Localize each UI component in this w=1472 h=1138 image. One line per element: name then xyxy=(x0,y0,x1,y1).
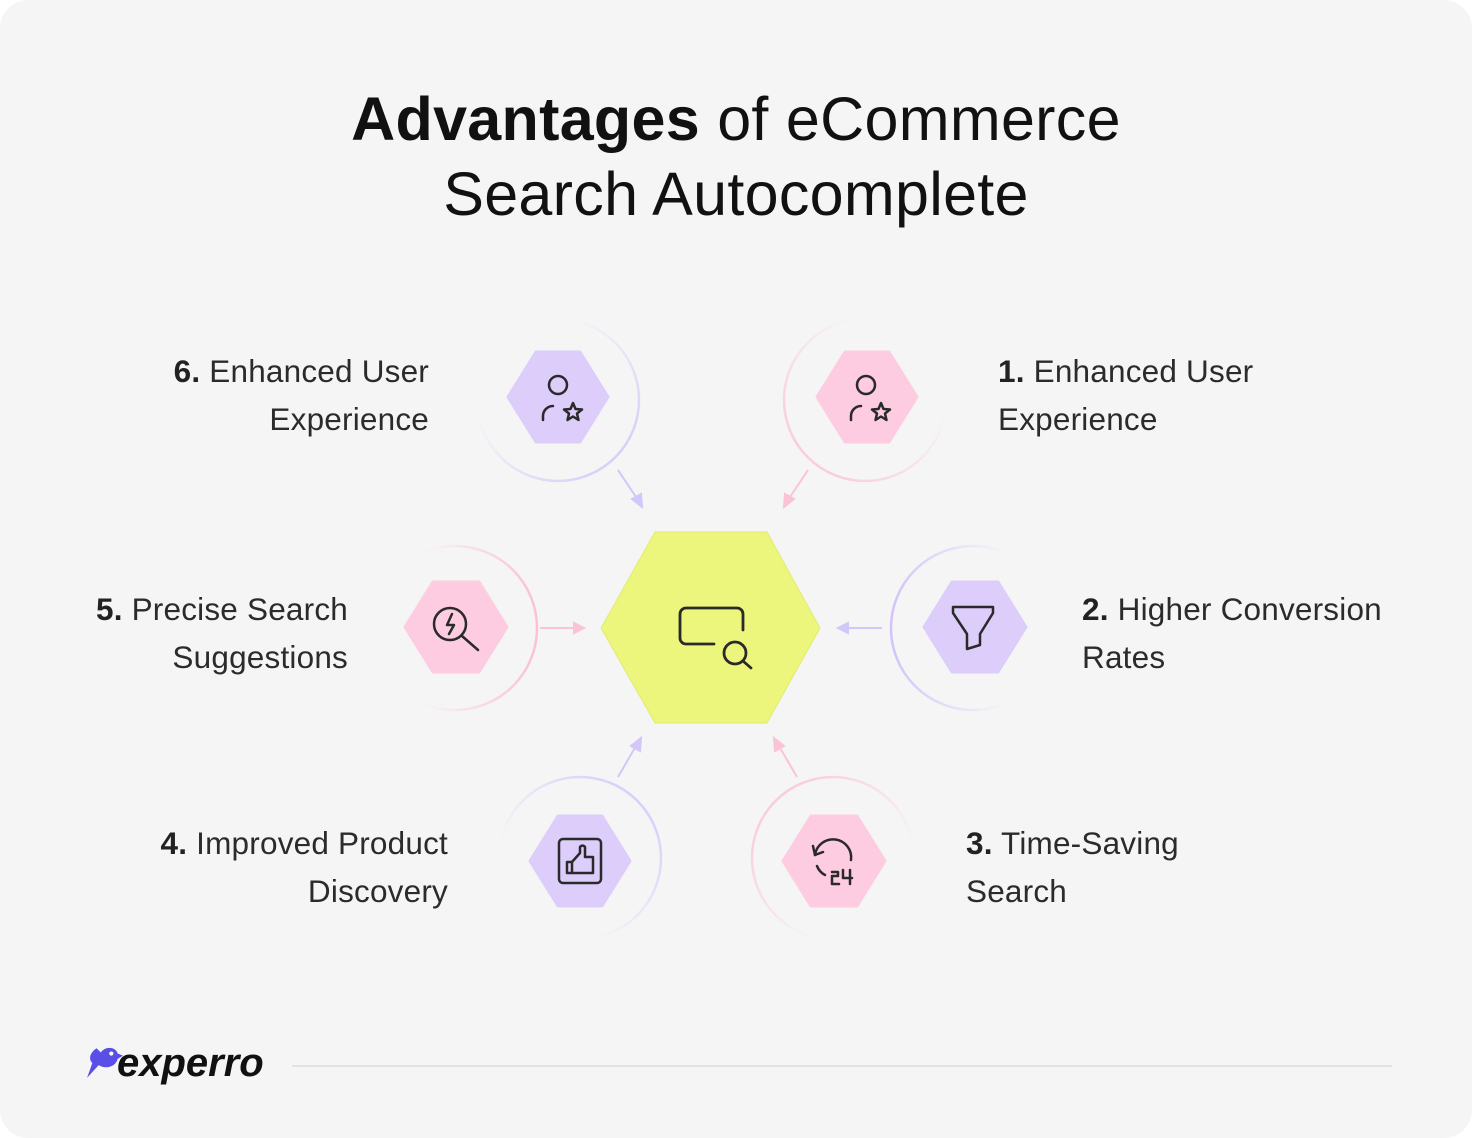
icon: search bolt xyxy=(434,608,478,650)
label 6 xyxy=(174,353,429,437)
label 4: Discovery xyxy=(308,873,448,909)
hex 2 xyxy=(924,582,1026,672)
label 1 xyxy=(998,353,1253,437)
label 2 xyxy=(1082,591,1382,675)
label 1: Experience xyxy=(998,401,1158,437)
hex 4 xyxy=(530,816,630,906)
hex 1 xyxy=(817,352,917,442)
icon: search box xyxy=(680,608,751,668)
label 3 xyxy=(966,825,1179,909)
hex 5 xyxy=(405,582,507,672)
arrow 4 xyxy=(618,738,641,777)
label 5: 5. Precise Search xyxy=(96,591,348,627)
label 1: 1. Enhanced User xyxy=(998,353,1253,389)
title: Search Autocomplete xyxy=(443,160,1029,228)
icon: user star xyxy=(543,376,582,420)
icon: user star xyxy=(851,376,890,420)
icon: thumbs up xyxy=(559,839,601,883)
label 2: 2. Higher Conversion xyxy=(1082,591,1382,627)
icon: bird xyxy=(87,1048,123,1078)
arrow 3 xyxy=(774,738,797,777)
ring 1 xyxy=(784,319,946,481)
arrow 6 xyxy=(618,470,642,507)
hex 3 xyxy=(783,816,885,906)
label 5: Suggestions xyxy=(172,639,348,675)
label 3: 3. Time-Saving xyxy=(966,825,1179,861)
arrow 2 xyxy=(838,623,882,633)
arrow 1 xyxy=(784,470,808,507)
arrow 5 xyxy=(540,623,584,633)
hex 6 xyxy=(508,352,608,442)
label 4: 4. Improved Product xyxy=(161,825,448,861)
label 3: Search xyxy=(966,873,1067,909)
ring 6 xyxy=(477,319,639,481)
label 2: Rates xyxy=(1082,639,1165,675)
divider xyxy=(292,1065,1392,1067)
title: Advantages of eCommerce xyxy=(351,85,1121,153)
label 6: Experience xyxy=(269,401,429,437)
ring 3 xyxy=(752,777,914,939)
logo xyxy=(87,1041,264,1085)
ring 4 xyxy=(499,777,661,939)
ring 5 xyxy=(373,546,537,710)
icon: funnel xyxy=(953,607,993,649)
wordmark: experro xyxy=(117,1041,264,1085)
title xyxy=(351,85,1121,228)
label 6: 6. Enhanced User xyxy=(174,353,429,389)
label 4 xyxy=(160,825,448,909)
label 5 xyxy=(96,591,348,675)
center hexagon xyxy=(601,532,820,723)
ring 2 xyxy=(891,546,1055,710)
icon: 24h xyxy=(813,839,852,884)
